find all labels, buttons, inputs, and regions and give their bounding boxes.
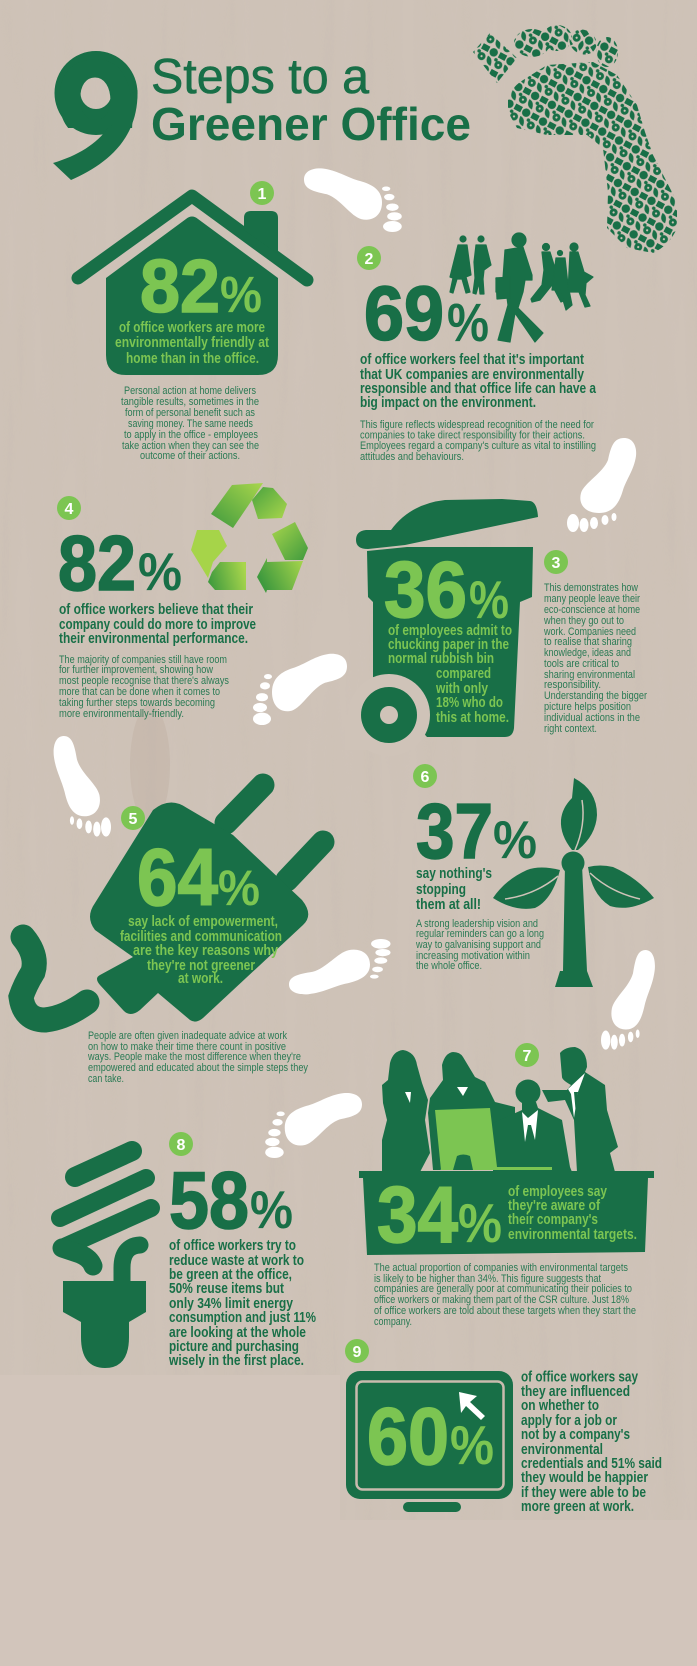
step badge 3 (544, 550, 568, 574)
stat caption: big impact on the environment. (360, 395, 536, 411)
body text: for further improvement, showing how (59, 664, 213, 676)
icon: house (78, 196, 307, 375)
body text: most people recognise that there's always (59, 675, 229, 687)
stat caption: chucking paper in the (388, 637, 509, 653)
step badge 6: 6 (421, 769, 430, 786)
body text: take action when they can see the (122, 440, 259, 452)
stat caption: of office workers believe that their (59, 602, 253, 618)
stat caption (59, 602, 256, 647)
body text: tools are critical to (544, 658, 619, 670)
body text (87, 1030, 308, 1085)
body text: the whole office. (416, 960, 482, 972)
stat caption: compared (436, 666, 491, 682)
stat caption: of employees admit to (388, 623, 512, 639)
stat caption: be green at the office, (169, 1267, 292, 1283)
step badge 2: 2 (365, 251, 374, 268)
icon: walking people silhouettes (450, 233, 593, 342)
panel: step 3 bin (345, 499, 647, 756)
step badge 2 (357, 246, 381, 270)
body text: The actual proportion of companies with environmental targets (374, 1262, 628, 1274)
icon: power plug (21, 785, 323, 1022)
stat caption: picture and purchasing (169, 1339, 299, 1355)
stat caption: say lack of empowerment, (128, 914, 278, 930)
step badge 9: 9 (353, 1344, 362, 1361)
icon: computer monitor (346, 1371, 513, 1512)
body text: A strong leadership vision and (416, 918, 538, 930)
stat caption (521, 1370, 662, 1515)
icon: wheelie bin (345, 499, 538, 756)
stat caption: of office workers try to (169, 1238, 296, 1254)
icon: office people silhouettes (382, 1047, 618, 1172)
body text: empowered and educated about the simple steps they (88, 1062, 308, 1074)
stat caption: say nothing's (416, 866, 492, 882)
body text: This figure reflects widespread recognition of the need for (360, 419, 594, 431)
step badge 8 (169, 1132, 193, 1156)
icon: large footprint made of eco icons (473, 25, 677, 253)
stat caption: of office workers say (521, 1370, 638, 1386)
body text: on how to make their time there count in positive (88, 1041, 286, 1053)
stat: 64%: 64 (137, 833, 218, 923)
stat caption: at work. (178, 971, 223, 987)
body text: sharing environmental (544, 669, 635, 681)
body text: tangible results, sometimes in the (121, 396, 259, 408)
stat: 69%: % (447, 293, 489, 353)
stat caption: consumption and just 11% (169, 1310, 316, 1326)
body text: of office workers are told about these targets when they start the (374, 1305, 636, 1317)
stat caption: reduce waste at work to (169, 1253, 304, 1269)
stat caption: responsible and that office life can have a (360, 381, 597, 397)
icon: mouse cursor (459, 1392, 485, 1420)
icon: white footprint 4 (54, 736, 111, 837)
step badge 4 (57, 496, 81, 520)
body text: taking further steps towards becoming (59, 697, 215, 709)
stat: 64%: % (218, 860, 260, 916)
stat caption: 18% who do (436, 695, 503, 711)
panel: step 8 light bulb (60, 1132, 316, 1369)
step badge 7: 7 (523, 1048, 532, 1065)
icon: white footprint 3 (253, 654, 347, 725)
stat caption: with only (435, 681, 488, 697)
step badge 9 (345, 1339, 369, 1363)
body text (121, 385, 259, 462)
stat: 34%: 34 (377, 1170, 458, 1259)
stat caption: environmentally friendly at (115, 335, 269, 351)
stat: 69%: 69 (364, 271, 444, 357)
step badge 4: 4 (65, 501, 74, 518)
stat: 37%: % (493, 811, 537, 870)
body text: is likely to be higher than 34%. This figure suggests that (374, 1273, 601, 1285)
body text (59, 654, 229, 720)
body text: This demonstrates how (544, 582, 638, 594)
icon: leaf wind turbine (493, 778, 654, 987)
icon: white footprint 6 (601, 950, 655, 1050)
stat caption: their environmental performance. (59, 631, 248, 647)
stat caption: company could do more to improve (59, 617, 256, 633)
icon: white footprint 5 (289, 939, 391, 994)
stat: 82%: 82 (140, 244, 220, 328)
stat caption: 50% reuse items but (169, 1281, 284, 1297)
body text: Understanding the bigger (544, 690, 647, 702)
body text: eco-conscience at home (544, 604, 640, 616)
title: 9 (54, 25, 138, 215)
panel: step 4 recycling (57, 483, 308, 720)
stat caption: they're aware of (508, 1198, 600, 1214)
panel: step 2 commuters (357, 233, 597, 463)
stat: 82%: 82 (58, 519, 136, 607)
stat caption: only 34% limit energy (169, 1296, 293, 1312)
body text: attitudes and behaviours. (360, 451, 464, 463)
stat caption: normal rubbish bin (388, 651, 494, 667)
stat caption: of office workers are more (119, 320, 265, 336)
stat caption: they're not greener (147, 958, 255, 974)
step badge 1: 1 (258, 186, 267, 203)
panel: step 9 computer monitor (345, 1339, 662, 1515)
stat caption: this at home. (436, 710, 509, 726)
step badge 3: 3 (552, 555, 561, 572)
body text: Personal action at home delivers (124, 385, 256, 397)
title: Greener Office (151, 98, 471, 150)
body text: many people leave their (544, 593, 640, 605)
desk panel (359, 1171, 654, 1255)
icon: recycling arrows (191, 483, 308, 593)
body text: right context. (544, 723, 597, 735)
stat: 34%: % (458, 1192, 502, 1254)
body text: companies are generally poor at communicating their policies to (374, 1283, 632, 1295)
body text: regular reminders can go a long (416, 928, 544, 940)
step badge 5 (121, 806, 145, 830)
stat caption (416, 866, 492, 913)
body text: to apply in the office - employees (124, 429, 258, 441)
panel: step 6 wind turbine (413, 764, 654, 987)
body text (360, 419, 596, 463)
stat caption: environmental (521, 1442, 603, 1458)
stat caption (388, 623, 512, 726)
stat caption: home than in the office. (126, 351, 259, 367)
stat: 82% (58, 519, 182, 607)
body text: way to galvanising support and (415, 939, 541, 951)
stat: 60%: % (450, 1414, 494, 1476)
body text: form of personal benefit such as (125, 407, 255, 419)
title: Steps to a (151, 50, 370, 104)
stat caption: stopping (416, 882, 466, 898)
title (53, 51, 470, 180)
body text: can take. (88, 1073, 124, 1085)
body text: Employees regard a company's culture as vital to instilling (360, 440, 596, 452)
panel: step 7 office team (359, 1043, 654, 1328)
body text: The majority of companies still have room (59, 654, 227, 666)
stat caption: are looking at the whole (169, 1325, 306, 1341)
step badge 7 (515, 1043, 539, 1067)
stat: 60%: 60 (367, 1392, 449, 1482)
stat caption: they are influenced (521, 1384, 630, 1400)
stat: 82% (140, 244, 262, 328)
body text: saving money. The same needs (128, 418, 253, 430)
body text: office workers or making them part of the CSR culture. Just 18% (374, 1294, 629, 1306)
stat caption: on whether to (521, 1398, 599, 1414)
body text: when they go out to (543, 615, 624, 627)
stat caption: them at all! (416, 897, 481, 913)
body text: more that can be done when it comes to (59, 686, 220, 698)
stat: 37%: 37 (416, 787, 493, 875)
stat caption (115, 320, 269, 367)
stat caption: they would be happier (521, 1470, 648, 1486)
icon: white footprint 1 (304, 168, 402, 232)
body text: People are often given inadequate advice at work (88, 1030, 287, 1042)
stat caption: credentials and 51% said (521, 1456, 662, 1472)
stat caption: of employees say (508, 1184, 607, 1200)
stat caption (168, 1238, 316, 1369)
stat: 82%: % (220, 266, 262, 323)
icon: white footprint 7 (265, 1093, 362, 1158)
body text: company. (374, 1316, 412, 1328)
body text: work. Companies need (543, 626, 636, 638)
body text (543, 582, 647, 735)
stat: 58%: 58 (169, 1156, 249, 1246)
body text (374, 1262, 636, 1328)
step badge 8: 8 (177, 1137, 186, 1154)
body text: ways. People make the most difference when they're (87, 1051, 301, 1063)
stat: 69% (364, 271, 489, 357)
stat caption: facilities and communication (120, 929, 282, 945)
stat caption: apply for a job or (521, 1413, 617, 1429)
stat caption: environmental targets. (508, 1227, 637, 1243)
icon: white footprint 2 (567, 438, 636, 532)
stat caption: are the key reasons why (133, 943, 278, 959)
stat caption: that UK companies are environmentally (360, 367, 584, 383)
body text (415, 918, 544, 972)
step badge 5: 5 (129, 811, 138, 828)
body text: more environmentally-friendly. (59, 708, 184, 720)
body text: to realise that sharing (544, 636, 632, 648)
body text: increasing motivation within (416, 950, 530, 962)
stat caption: of office workers feel that it's important (360, 352, 584, 368)
stat caption: wisely in the first place. (168, 1353, 304, 1369)
body text: responsibility. (544, 679, 601, 691)
stat caption: their company's (508, 1212, 598, 1228)
stat: 82%: % (138, 543, 182, 602)
panel: step 1 house (78, 181, 307, 462)
stat: 58%: % (250, 1181, 293, 1240)
body text: individual actions in the (544, 712, 640, 724)
body text: outcome of their actions. (140, 450, 240, 462)
panel: step 5 plug (21, 785, 323, 1085)
body text: knowledge, ideas and (544, 647, 631, 659)
step badge 1 (250, 181, 274, 205)
stat caption: more green at work. (521, 1499, 634, 1515)
step badge 6 (413, 764, 437, 788)
stat caption: not by a company's (521, 1427, 630, 1443)
stat: 36%: % (469, 571, 509, 630)
body text: picture helps position (544, 701, 631, 713)
stat caption (360, 352, 597, 411)
body text: companies to take direct responsibility for their actions. (360, 430, 585, 442)
stat caption (508, 1184, 637, 1243)
icon: energy saving bulb (60, 1151, 151, 1368)
stat caption (120, 914, 282, 987)
stat: 36%: 36 (384, 545, 467, 634)
stat caption: if they were able to be (521, 1485, 646, 1501)
